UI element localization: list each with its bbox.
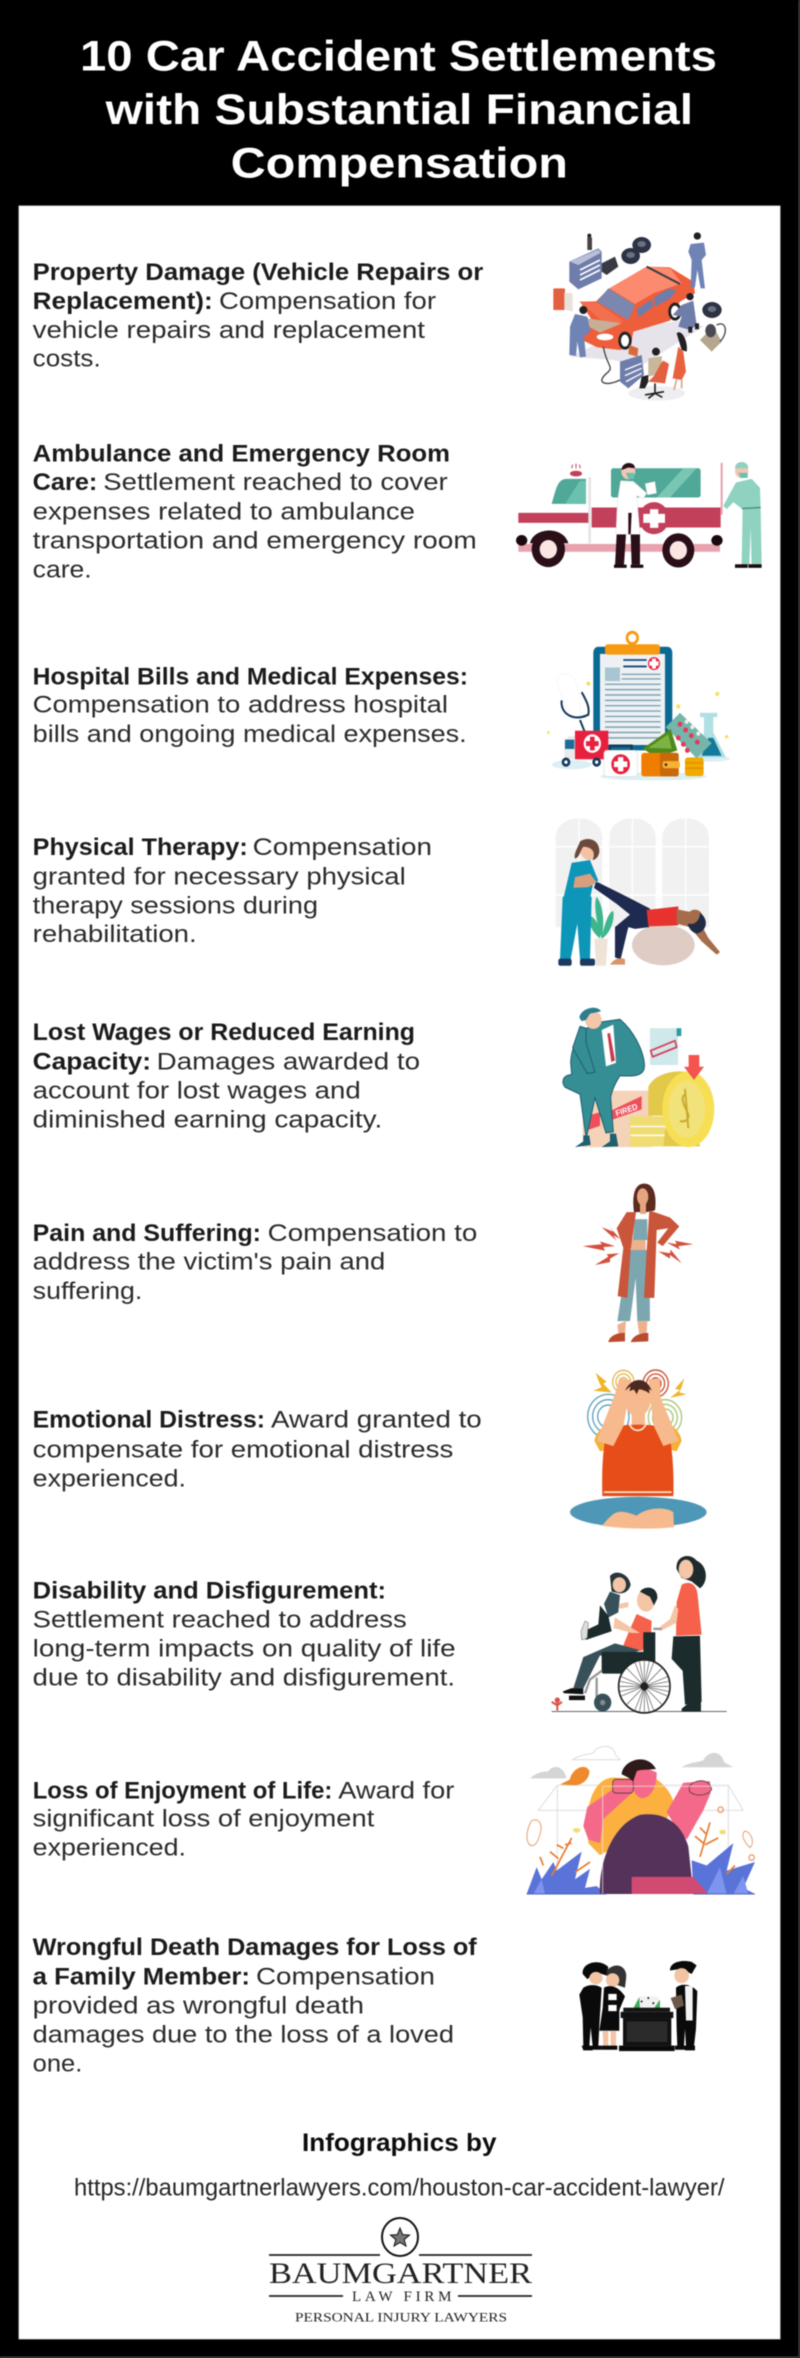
text block: ambulance and emergency room care: transportation and emergency room (33, 527, 477, 554)
text block: ambulance and emergency room care: Settlement reached to cover (103, 469, 448, 496)
text block: disability and disfigurement: Settlement reached to address (33, 1607, 407, 1634)
text block: hospital bills and medical expenses (33, 663, 468, 748)
title (80, 33, 717, 187)
text block: emotional distress: compensate for emotional distress (33, 1436, 453, 1463)
section: emotional distress (33, 1370, 707, 1529)
section: lost wages (33, 1008, 714, 1147)
text block: loss of enjoyment of life (33, 1777, 454, 1862)
icon: woman in pain (583, 1184, 693, 1342)
text block: physical therapy: therapy sessions during (33, 892, 318, 919)
text block: hospital bills and medical expenses: Compensation to address hospital (33, 692, 448, 719)
logo: Baumgartner Law Firm (269, 2218, 532, 2325)
text block: property damage: Replacement): (33, 288, 213, 315)
text block: loss of enjoyment of life: Loss of Enjoyment of Life: (33, 1777, 332, 1804)
icon: fired worker with coins (563, 1008, 714, 1147)
text block: wrongful death damages: one. (33, 2051, 82, 2078)
footer url: https://baumgartnerlawyers.com/houston-car-accident-lawyer/ (74, 2175, 725, 2202)
logo: Baumgartner Law Firm: BAUMGARTNER (269, 2257, 532, 2290)
icon: fired worker with coins: FIRED (614, 1101, 639, 1118)
icon: funeral mourners at coffin (579, 1961, 697, 2051)
text block: property damage (33, 259, 483, 373)
logo: Baumgartner Law Firm: PERSONAL INJURY LAWYERS (295, 2310, 507, 2325)
text block: physical therapy: granted for necessary physical (33, 863, 406, 890)
text block: hospital bills and medical expenses: bills and ongoing medical expenses. (33, 721, 467, 748)
text block: wrongful death damages (33, 1934, 478, 2078)
text block: ambulance and emergency room care: Care: (33, 469, 97, 496)
text block: physical therapy: Physical Therapy: (33, 834, 248, 861)
text block: disability and disfigurement: Disability and Disfigurement: (33, 1577, 386, 1604)
text block: pain and suffering: Pain and Suffering: (33, 1220, 261, 1247)
text block: ambulance and emergency room care: Ambulance and Emergency Room (33, 441, 450, 468)
text block: loss of enjoyment of life: significant loss of enjoyment (33, 1806, 375, 1833)
title: Compensation (231, 139, 568, 187)
section: pain and suffering (33, 1184, 693, 1342)
section: loss of enjoyment of life (33, 1746, 755, 1894)
text block: pain and suffering: Compensation to (268, 1220, 477, 1247)
section: disability and disfigurement (33, 1556, 727, 1713)
icon: car repair workshop (553, 232, 725, 401)
text block: pain and suffering: address the victim's pain and (33, 1248, 385, 1275)
text block: wrongful death damages: provided as wrongful death (33, 1992, 364, 2019)
icon: stressed man sitting cross-legged (570, 1370, 707, 1529)
text block: pain and suffering (33, 1220, 477, 1305)
section: physical therapy (33, 818, 720, 966)
text block: physical therapy: Compensation (253, 834, 432, 861)
text block: wrongful death damages: damages due to the loss of a loved (33, 2021, 454, 2048)
text block: hospital bills and medical expenses: Hospital Bills and Medical Expenses: (33, 663, 468, 690)
text block: loss of enjoyment of life: experienced. (33, 1835, 186, 1862)
text block: lost wages or reduced earning capacity: account for lost wages and (33, 1078, 361, 1105)
icon: family with wheelchair user (552, 1556, 727, 1713)
text block: wrongful death damages: Wrongful Death Damages for Loss of (33, 1934, 478, 1961)
text block: lost wages or reduced earning capacity: Lost Wages or Reduced Earning (33, 1019, 415, 1046)
text block: emotional distress: experienced. (33, 1466, 186, 1493)
section: hospital bills and medical expenses (33, 632, 730, 780)
text block: disability and disfigurement (33, 1577, 456, 1692)
section: ambulance and emergency room care (33, 441, 762, 583)
text block: property damage: vehicle repairs and replacement (33, 317, 425, 344)
text block: ambulance and emergency room care: care. (33, 556, 92, 583)
text block: lost wages or reduced earning capacity: Damages awarded to (157, 1048, 420, 1075)
text block: property damage: costs. (33, 346, 101, 373)
section: property damage (33, 232, 725, 401)
text block: ambulance and emergency room care (33, 441, 477, 583)
title: 10 Car Accident Settlements (80, 33, 717, 81)
icon: medical clipboard, first aid kit and wallet (547, 632, 730, 780)
icon: ambulance with doctor and paramedic (516, 462, 762, 568)
icon: man trapped in glass box (527, 1746, 755, 1894)
text block: disability and disfigurement: due to disability and disfigurement. (33, 1665, 455, 1692)
text block: pain and suffering: suffering. (33, 1278, 142, 1305)
text block: wrongful death damages: Compensation (256, 1963, 435, 1990)
logo: Baumgartner Law Firm: LAW FIRM (352, 2289, 452, 2305)
icon: physical therapy session (556, 818, 720, 966)
title: with Substantial Financial (104, 86, 693, 134)
text block: emotional distress: Award granted to (271, 1407, 482, 1434)
text block: loss of enjoyment of life: Award for (338, 1777, 454, 1804)
text block: lost wages or reduced earning capacity: diminished earning capacity. (33, 1106, 382, 1133)
footer heading: infographics by: Infographics by (302, 2129, 497, 2157)
text block: wrongful death damages: a Family Member: (33, 1963, 250, 1990)
text block: physical therapy (33, 834, 432, 948)
text block: physical therapy: rehabilitation. (33, 921, 197, 948)
text block: property damage: Compensation for (219, 288, 436, 315)
text block: property damage: Property Damage (Vehicle Repairs or (33, 259, 483, 286)
text block: lost wages or reduced earning capacity: Capacity: (33, 1048, 151, 1075)
text block: lost wages or reduced earning capacity (33, 1019, 420, 1133)
section: wrongful death damages (33, 1934, 697, 2078)
text block: disability and disfigurement: long-term impacts on quality of life (33, 1636, 456, 1663)
text block: emotional distress: Emotional Distress: (33, 1407, 265, 1434)
text block: emotional distress (33, 1407, 482, 1493)
text block: ambulance and emergency room care: expenses related to ambulance (33, 498, 415, 525)
